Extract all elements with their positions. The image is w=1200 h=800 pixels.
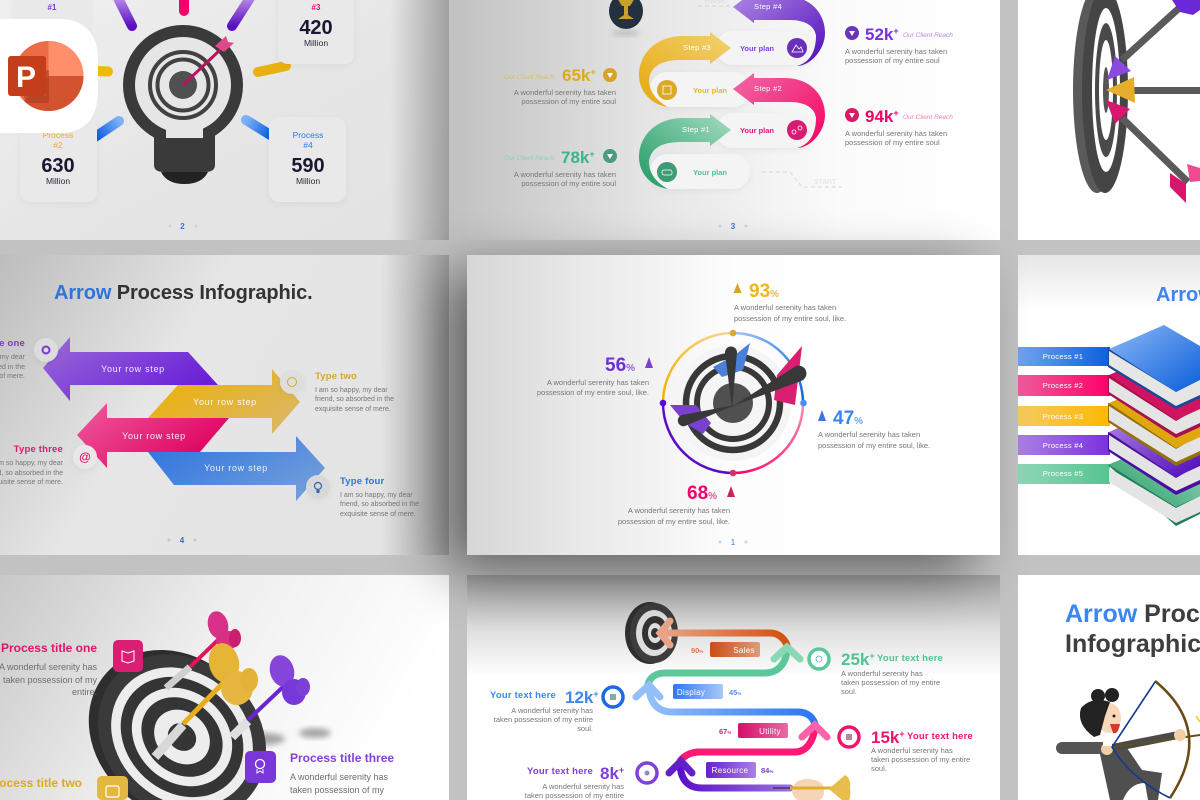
slide title: Arrow Process Infographic. <box>54 282 313 304</box>
icon badge: at sign <box>73 445 97 469</box>
stat 15k: A wonderful serenity has <box>871 746 953 755</box>
purple book <box>1108 408 1200 495</box>
label utility: 67% <box>719 727 731 736</box>
process title one text: Process title one <box>1 641 97 655</box>
process card 3: #3 <box>312 3 321 12</box>
type two text: friend, so absorbed in the <box>315 396 394 403</box>
plan pill row 3 <box>650 72 750 107</box>
process bars: Process #1 <box>1043 352 1083 361</box>
stat 94k <box>845 107 953 147</box>
stat 15k: soul. <box>871 764 887 773</box>
process card 2 <box>20 117 97 202</box>
ring dots <box>660 330 807 476</box>
panel: slide 6 winding arrow path <box>467 575 1000 800</box>
purple path segment <box>669 761 790 788</box>
process bars: Process #2 <box>1043 381 1083 390</box>
label display <box>673 684 741 699</box>
panel: slide 1 center target percentages <box>467 255 1000 555</box>
stat 12k: A wonderful serenity has <box>511 706 593 715</box>
stat 8k: Your text here <box>527 766 593 777</box>
stat 15k: 15k <box>871 728 899 747</box>
type four text: exquisite sense of mere. <box>340 511 416 518</box>
stat 78k: 78k <box>561 148 589 167</box>
slide title <box>1065 600 1200 658</box>
stat 25k: soul. <box>841 687 857 696</box>
ribbon step 3: Step #3 <box>683 43 711 52</box>
trophy badge <box>609 0 643 36</box>
dartboard side view <box>1073 0 1128 193</box>
start path: START <box>814 179 837 186</box>
stat 15k: taken possession of my entire <box>871 755 970 764</box>
stat 15k: Your text here <box>907 731 973 742</box>
process card 3: 420 <box>299 17 333 39</box>
stat 65k: + <box>590 67 596 77</box>
orange path segment <box>660 621 787 645</box>
stat 65k: possession of my entire soul <box>521 97 616 106</box>
stat 12k: Your text here <box>490 690 556 701</box>
process bars <box>1018 347 1110 484</box>
stat 8k: taken possession of my entire <box>525 791 624 800</box>
plan labels and icons <box>657 38 807 182</box>
stat 12k <box>490 687 623 733</box>
hand holding dart <box>773 775 850 800</box>
stat 65k <box>504 66 617 106</box>
page number <box>718 222 748 231</box>
stat 78k: Our Client Reach <box>504 155 554 162</box>
stat 56 percent: A wonderful serenity has taken <box>547 378 649 387</box>
stat 8k <box>525 763 657 800</box>
green book <box>1108 440 1200 526</box>
icon: award <box>245 751 276 783</box>
stat 78k: possession of my entire soul <box>521 179 616 188</box>
type four text: Type four <box>340 476 384 487</box>
target backdrop <box>675 345 791 461</box>
stat 12k: + <box>593 689 599 699</box>
ribbon step 1: Step #1 <box>682 125 710 134</box>
light rays <box>95 0 286 137</box>
label utility: Utility <box>759 727 781 736</box>
label sales <box>691 642 760 657</box>
process card 2: Million <box>46 176 70 186</box>
stat 47 percent: A wonderful serenity has taken <box>818 430 920 439</box>
icon: PowerPoint app badge: P <box>16 61 36 94</box>
process title three text <box>290 751 394 795</box>
type four text: friend, so absorbed in the <box>340 501 419 508</box>
book stack <box>1108 325 1200 526</box>
stat 94k: A wonderful serenity has taken <box>845 129 947 138</box>
ribbon step 2: Step #2 <box>754 84 782 93</box>
label display: 45% <box>729 688 741 697</box>
type two text: Type two <box>315 371 357 382</box>
arrow shafts <box>1122 0 1200 182</box>
process card 1 <box>13 0 90 65</box>
panel: slide target arrows top right <box>1018 0 1200 240</box>
process title one text: taken possession of my <box>3 675 97 685</box>
process title one text: A wonderful serenity has <box>0 662 97 672</box>
icon badge: clock <box>280 370 304 394</box>
process card 4: Million <box>296 176 320 186</box>
process title one text: entire. <box>72 687 97 697</box>
stat 56 percent <box>537 355 653 397</box>
panel: slide 5 dartboard process <box>0 575 449 800</box>
page number <box>168 222 198 231</box>
label resource <box>706 762 773 778</box>
stat 68 percent: A wonderful serenity has taken <box>628 506 730 515</box>
process bars: Process #5 <box>1043 469 1083 478</box>
process title three text: taken possession of my <box>290 785 385 795</box>
ribbon step 3 <box>639 32 731 107</box>
darts <box>678 346 806 426</box>
gold book <box>1108 379 1200 466</box>
label utility <box>719 723 788 738</box>
plan labels and icons: Your plan <box>740 126 774 135</box>
plan labels and icons: Your plan <box>693 168 727 177</box>
dartboard <box>54 614 300 800</box>
stat 93 percent: A wonderful serenity has taken <box>734 303 836 312</box>
purple arrow: Your row step <box>101 364 165 374</box>
dart purple <box>232 652 310 737</box>
stat 78k <box>504 148 617 188</box>
stat 93 percent: possession of my entire soul, like. <box>734 314 846 323</box>
blue book <box>1108 325 1200 409</box>
stat 25k: 25k <box>841 650 869 669</box>
target rings <box>686 356 780 450</box>
stat 52k: A wonderful serenity has taken <box>845 47 947 56</box>
archer character <box>1062 681 1200 800</box>
slide title: Infographic <box>1065 630 1200 658</box>
icon badge: gear <box>34 338 58 362</box>
stat 65k: 65k <box>562 66 590 85</box>
type two text <box>315 371 394 413</box>
stat 56 percent: 56% <box>605 355 635 376</box>
process card 1: #1 <box>48 3 57 12</box>
dart shadows <box>245 728 331 745</box>
purple arrow <box>43 337 218 401</box>
page number: 3 <box>731 222 736 231</box>
stat 25k: taken possession of my entire <box>841 678 940 687</box>
gold arrow <box>148 369 300 434</box>
stat 25k: + <box>869 651 875 661</box>
green path segment <box>648 647 800 684</box>
stat 12k: 12k <box>565 688 593 707</box>
label resource: 84% <box>761 766 773 775</box>
stat 25k: A wonderful serenity has <box>841 669 923 678</box>
segmented ring <box>663 333 803 473</box>
stat 12k: taken possession of my entire <box>494 715 593 724</box>
stat 94k: possession of my entire soul <box>845 138 940 147</box>
stat 68 percent: 68% <box>687 483 717 504</box>
fletching <box>670 343 802 434</box>
process card 2: 630 <box>41 155 75 177</box>
stat 8k: A wonderful serenity has <box>542 782 624 791</box>
dart pink <box>166 609 241 688</box>
stat 25k <box>809 649 943 696</box>
process card 2: Process <box>43 130 73 140</box>
ribbon step 1 <box>639 114 731 189</box>
pink arrow: Your row step <box>122 431 186 441</box>
page number: 2 <box>180 222 185 231</box>
arrow fletching <box>1170 0 1200 203</box>
type four text: I am so happy, my dear <box>340 492 413 499</box>
process bars: Process #4 <box>1043 441 1083 450</box>
label display: Display <box>677 688 705 697</box>
process card 2: #2 <box>53 140 63 150</box>
stat 47 percent: 47% <box>833 408 863 429</box>
stat 93 percent <box>734 281 846 323</box>
stat 68 percent <box>618 483 735 526</box>
icon badge: at sign: @ <box>79 450 91 464</box>
stat 47 percent: possession of my entire soul, like. <box>818 441 930 450</box>
page number: 1 <box>731 538 736 547</box>
icon: PowerPoint app badge <box>0 19 98 133</box>
type one text <box>0 338 26 380</box>
process card 3 <box>278 0 354 64</box>
stat 15k <box>839 727 973 773</box>
stat 25k: Your text here <box>877 653 943 664</box>
icon badge: bulb <box>306 475 330 499</box>
plan pill row 1 <box>650 154 750 189</box>
panel: slide stacked books <box>1018 255 1200 555</box>
process card 4: 590 <box>291 155 325 177</box>
stat 65k: A wonderful serenity has taken <box>514 88 616 97</box>
plan pill row 2 <box>716 113 816 148</box>
stat 52k: + <box>893 26 899 36</box>
type two text: exquisite sense of mere. <box>315 406 391 413</box>
stat 78k: A wonderful serenity has taken <box>514 170 616 179</box>
target board <box>625 602 678 664</box>
blue arrow: Your row step <box>204 463 268 473</box>
stat 65k: Our Client Reach <box>504 74 554 81</box>
stat 52k <box>845 25 953 65</box>
shadow of focused slide <box>447 272 972 570</box>
process card 4: #4 <box>303 140 313 150</box>
page number: 4 <box>180 536 185 545</box>
process title three text: Process title three <box>290 751 394 765</box>
stat 94k: 94k <box>865 107 893 126</box>
icon: map <box>113 640 143 672</box>
icon: shop <box>97 776 128 800</box>
process card 4: Process <box>293 130 323 140</box>
stat 15k: + <box>899 729 905 739</box>
plan labels and icons: Your plan <box>693 86 727 95</box>
start path <box>762 172 842 187</box>
pink book <box>1108 351 1200 438</box>
ribbon step 2 <box>733 73 825 148</box>
stat 94k: + <box>893 108 899 118</box>
process card 4 <box>269 117 346 202</box>
pink path segment <box>680 725 827 761</box>
stat 52k: possession of my entire soul <box>845 56 940 65</box>
stat 47 percent <box>818 408 930 450</box>
type four text <box>340 476 419 518</box>
type two text: I am so happy, my dear <box>315 387 388 394</box>
process title three text: A wonderful serenity has <box>290 772 389 782</box>
dart gold <box>155 640 258 757</box>
label sales: Sales <box>733 646 755 655</box>
stat 56 percent: possession of my entire soul, like. <box>537 388 649 397</box>
stat 93 percent: 93% <box>749 281 779 302</box>
panel: slide archer title <box>1018 575 1200 800</box>
stat 52k: Our Client Reach <box>903 32 953 39</box>
blue arrow <box>148 436 325 501</box>
plan labels and icons: Your plan <box>740 44 774 53</box>
type three text <box>0 444 64 486</box>
stat 8k: 8k <box>600 764 619 783</box>
ribbon step 4 <box>733 0 825 66</box>
label sales: 90% <box>691 646 703 655</box>
gold arrow: Your row step <box>193 397 257 407</box>
process card 3: Million <box>304 38 328 48</box>
stat 8k: + <box>619 765 624 775</box>
pink arrow <box>77 403 229 468</box>
plan pill row 4 <box>716 31 816 65</box>
blue path segment <box>636 685 815 724</box>
stat 68 percent: possession of my entire soul, like. <box>618 517 730 526</box>
finish path <box>698 0 730 6</box>
arrow heads <box>1106 56 1135 124</box>
panel: slide 2 lightbulb target <box>0 0 449 240</box>
page number <box>718 538 748 547</box>
page number <box>168 536 196 545</box>
panel: slide 3 step ribbons <box>467 0 1000 240</box>
ribbon step 4: Step #4 <box>754 2 782 11</box>
stat 78k: + <box>589 149 595 159</box>
lightbulb with target <box>123 25 243 184</box>
process bars: Process #3 <box>1043 412 1083 421</box>
type three text: Type three <box>14 444 63 455</box>
panel: slide 4 arrow process <box>0 255 449 555</box>
process title one text <box>0 641 97 697</box>
stat 12k: soul. <box>577 724 593 733</box>
stat 94k: Our Client Reach <box>903 114 953 121</box>
stat 52k: 52k <box>865 25 893 44</box>
label resource: Resource <box>712 766 749 775</box>
